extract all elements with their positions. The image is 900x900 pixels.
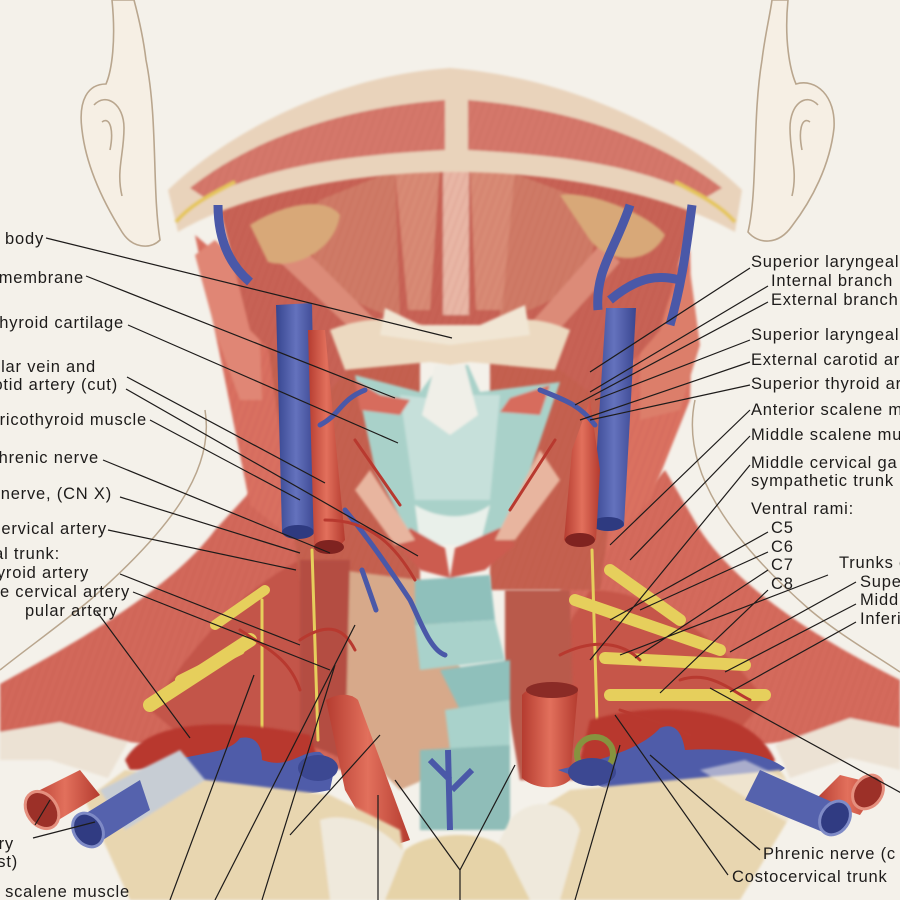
labels: right side	[732, 253, 900, 886]
labels: right side: Superior laryngeal	[751, 253, 899, 271]
labels: right side: Ventral rami:	[751, 500, 854, 518]
digastric and stylohyoid	[280, 245, 385, 345]
inferior thyroid veins	[430, 750, 472, 830]
pale fascia edges	[0, 722, 128, 778]
labels: right side: C5	[771, 519, 794, 537]
salivary glands	[250, 204, 340, 264]
labels: left side: e cervical artery	[0, 583, 130, 601]
deep scalene muscles	[150, 560, 345, 750]
labels: right side: C8	[771, 575, 794, 593]
labels: left side: body	[5, 230, 44, 248]
left upper veins	[218, 205, 250, 282]
leader lines	[33, 238, 900, 900]
labels: right side: C6	[771, 538, 794, 556]
thoracic duct	[577, 737, 613, 771]
panel: subclavian arteries	[125, 709, 775, 770]
right carotid artery	[564, 400, 600, 545]
labels: left side: ricothyroid muscle	[0, 411, 147, 429]
left subclavian vein	[132, 737, 335, 798]
panel: jaw and skin flap	[168, 68, 742, 264]
icon: cut right subclavian vessels	[745, 769, 890, 841]
icon: left ear	[81, 0, 160, 246]
panel: brachial plexus nerves	[150, 550, 765, 750]
labels: right side: C7	[771, 556, 794, 574]
labels: right side: Superior thyroid ar	[751, 375, 900, 393]
labels: left side	[0, 230, 147, 900]
labels: left side: nerve, (CN X)	[1, 485, 112, 503]
panel: clavicles and sternum	[85, 750, 830, 900]
labels: right side: Middle cervical ga	[751, 454, 897, 472]
labels: left side: hyroid cartilage	[0, 314, 124, 332]
left common carotid stump	[326, 695, 410, 850]
labels: right side: Internal branch	[771, 272, 893, 290]
labels: right side: sympathetic trunk	[751, 472, 894, 490]
icon: cut left subclavian vessels	[18, 770, 150, 853]
panel: larynx and trachea	[330, 305, 570, 830]
labels: right side: Phrenic nerve (c	[763, 845, 896, 863]
labels: right side: Anterior scalene m	[751, 401, 900, 419]
labels: right side: External branch	[771, 291, 899, 309]
labels: left side: pular artery	[25, 602, 118, 620]
panel: floor of mouth muscles	[215, 160, 700, 400]
labels: left side: membrane	[0, 269, 84, 287]
right jugular stump	[568, 758, 616, 786]
small branching vessels	[240, 390, 750, 735]
right common carotid stump	[522, 683, 578, 787]
right subclavian vein	[558, 726, 785, 794]
left jugular stump	[298, 755, 338, 781]
icon: right ear	[748, 0, 834, 241]
panel: jugular veins and carotid arteries	[132, 205, 785, 850]
panel: infrahyoid muscles	[262, 300, 640, 590]
left internal jugular vein	[276, 303, 316, 538]
labels: right side: Middle scalene mu	[751, 426, 900, 444]
panel: thyroid and cervical fat	[300, 560, 575, 790]
labels: right side: Midd	[860, 591, 899, 609]
left carotid artery	[308, 330, 345, 551]
neck outline	[0, 400, 900, 672]
labels: right side: External carotid ar	[751, 351, 900, 369]
labels: right side: Costocervical trunk	[732, 868, 888, 886]
right internal jugular vein	[592, 308, 636, 531]
panel: trapezius and shoulder muscles	[0, 470, 900, 778]
labels: left side: hrenic nerve	[0, 449, 99, 467]
panel: sternocleidomastoid muscles	[195, 235, 700, 570]
labels: right side: Superior laryngeal	[751, 326, 899, 344]
